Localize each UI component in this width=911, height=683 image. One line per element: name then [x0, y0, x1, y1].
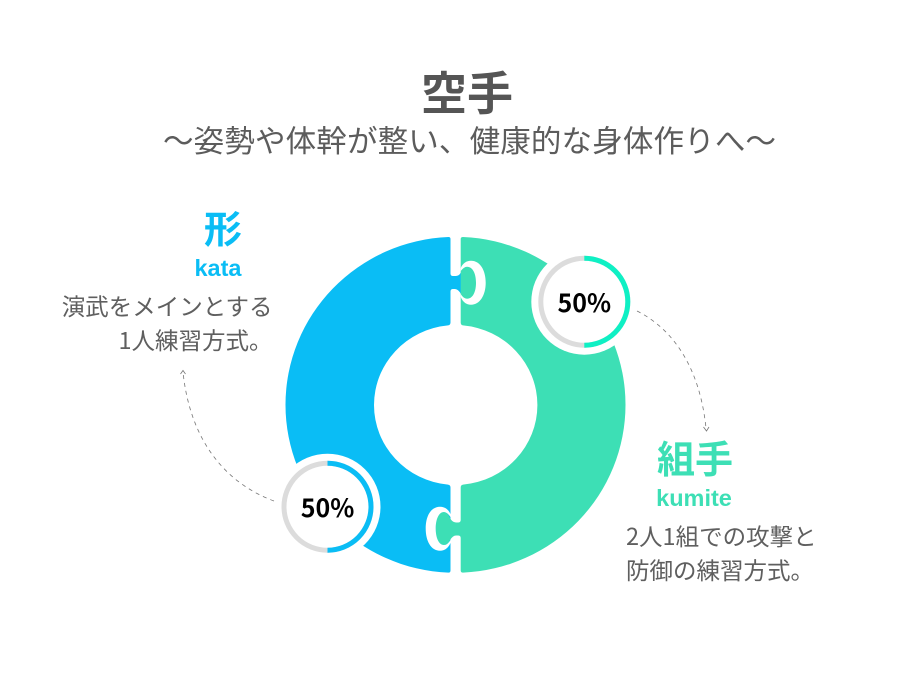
- kata kanji: 形: [204, 199, 242, 254]
- badge: kata 50%: 50%: [301, 489, 354, 525]
- kumite kanji: 組手: [657, 429, 733, 484]
- label: kata: [62, 199, 272, 356]
- badge: kumite 50%: [531, 249, 637, 355]
- kumite description: 防御の練習方式。: [626, 552, 814, 586]
- puzzle gap: top knob outline: [461, 261, 486, 305]
- kata description: 演武をメインとする: [62, 288, 272, 322]
- badge: kumite 50%: 50%: [558, 284, 611, 320]
- segment: kumite (green half): [436, 237, 626, 573]
- kumite description: 2人1組での攻撃と: [626, 518, 817, 552]
- arrow: kumite badge to kumite label: [637, 311, 709, 431]
- donut chart: puzzle ring: [286, 237, 626, 573]
- label: kumite: [626, 429, 817, 586]
- segment: kata (blue half): [286, 237, 476, 573]
- badge: kata 50%: [274, 454, 380, 560]
- kumite romaji: kumite: [656, 485, 732, 511]
- kata description: 1人練習方式。: [118, 322, 272, 356]
- arrow: kata badge to kata label: [180, 370, 274, 501]
- kata romaji: kata: [194, 255, 242, 281]
- subtitle: 〜姿勢や体幹が整い、健康的な身体作りへ〜: [163, 117, 776, 161]
- puzzle gap: bottom knob outline: [426, 507, 450, 551]
- title: 空手: [421, 58, 513, 124]
